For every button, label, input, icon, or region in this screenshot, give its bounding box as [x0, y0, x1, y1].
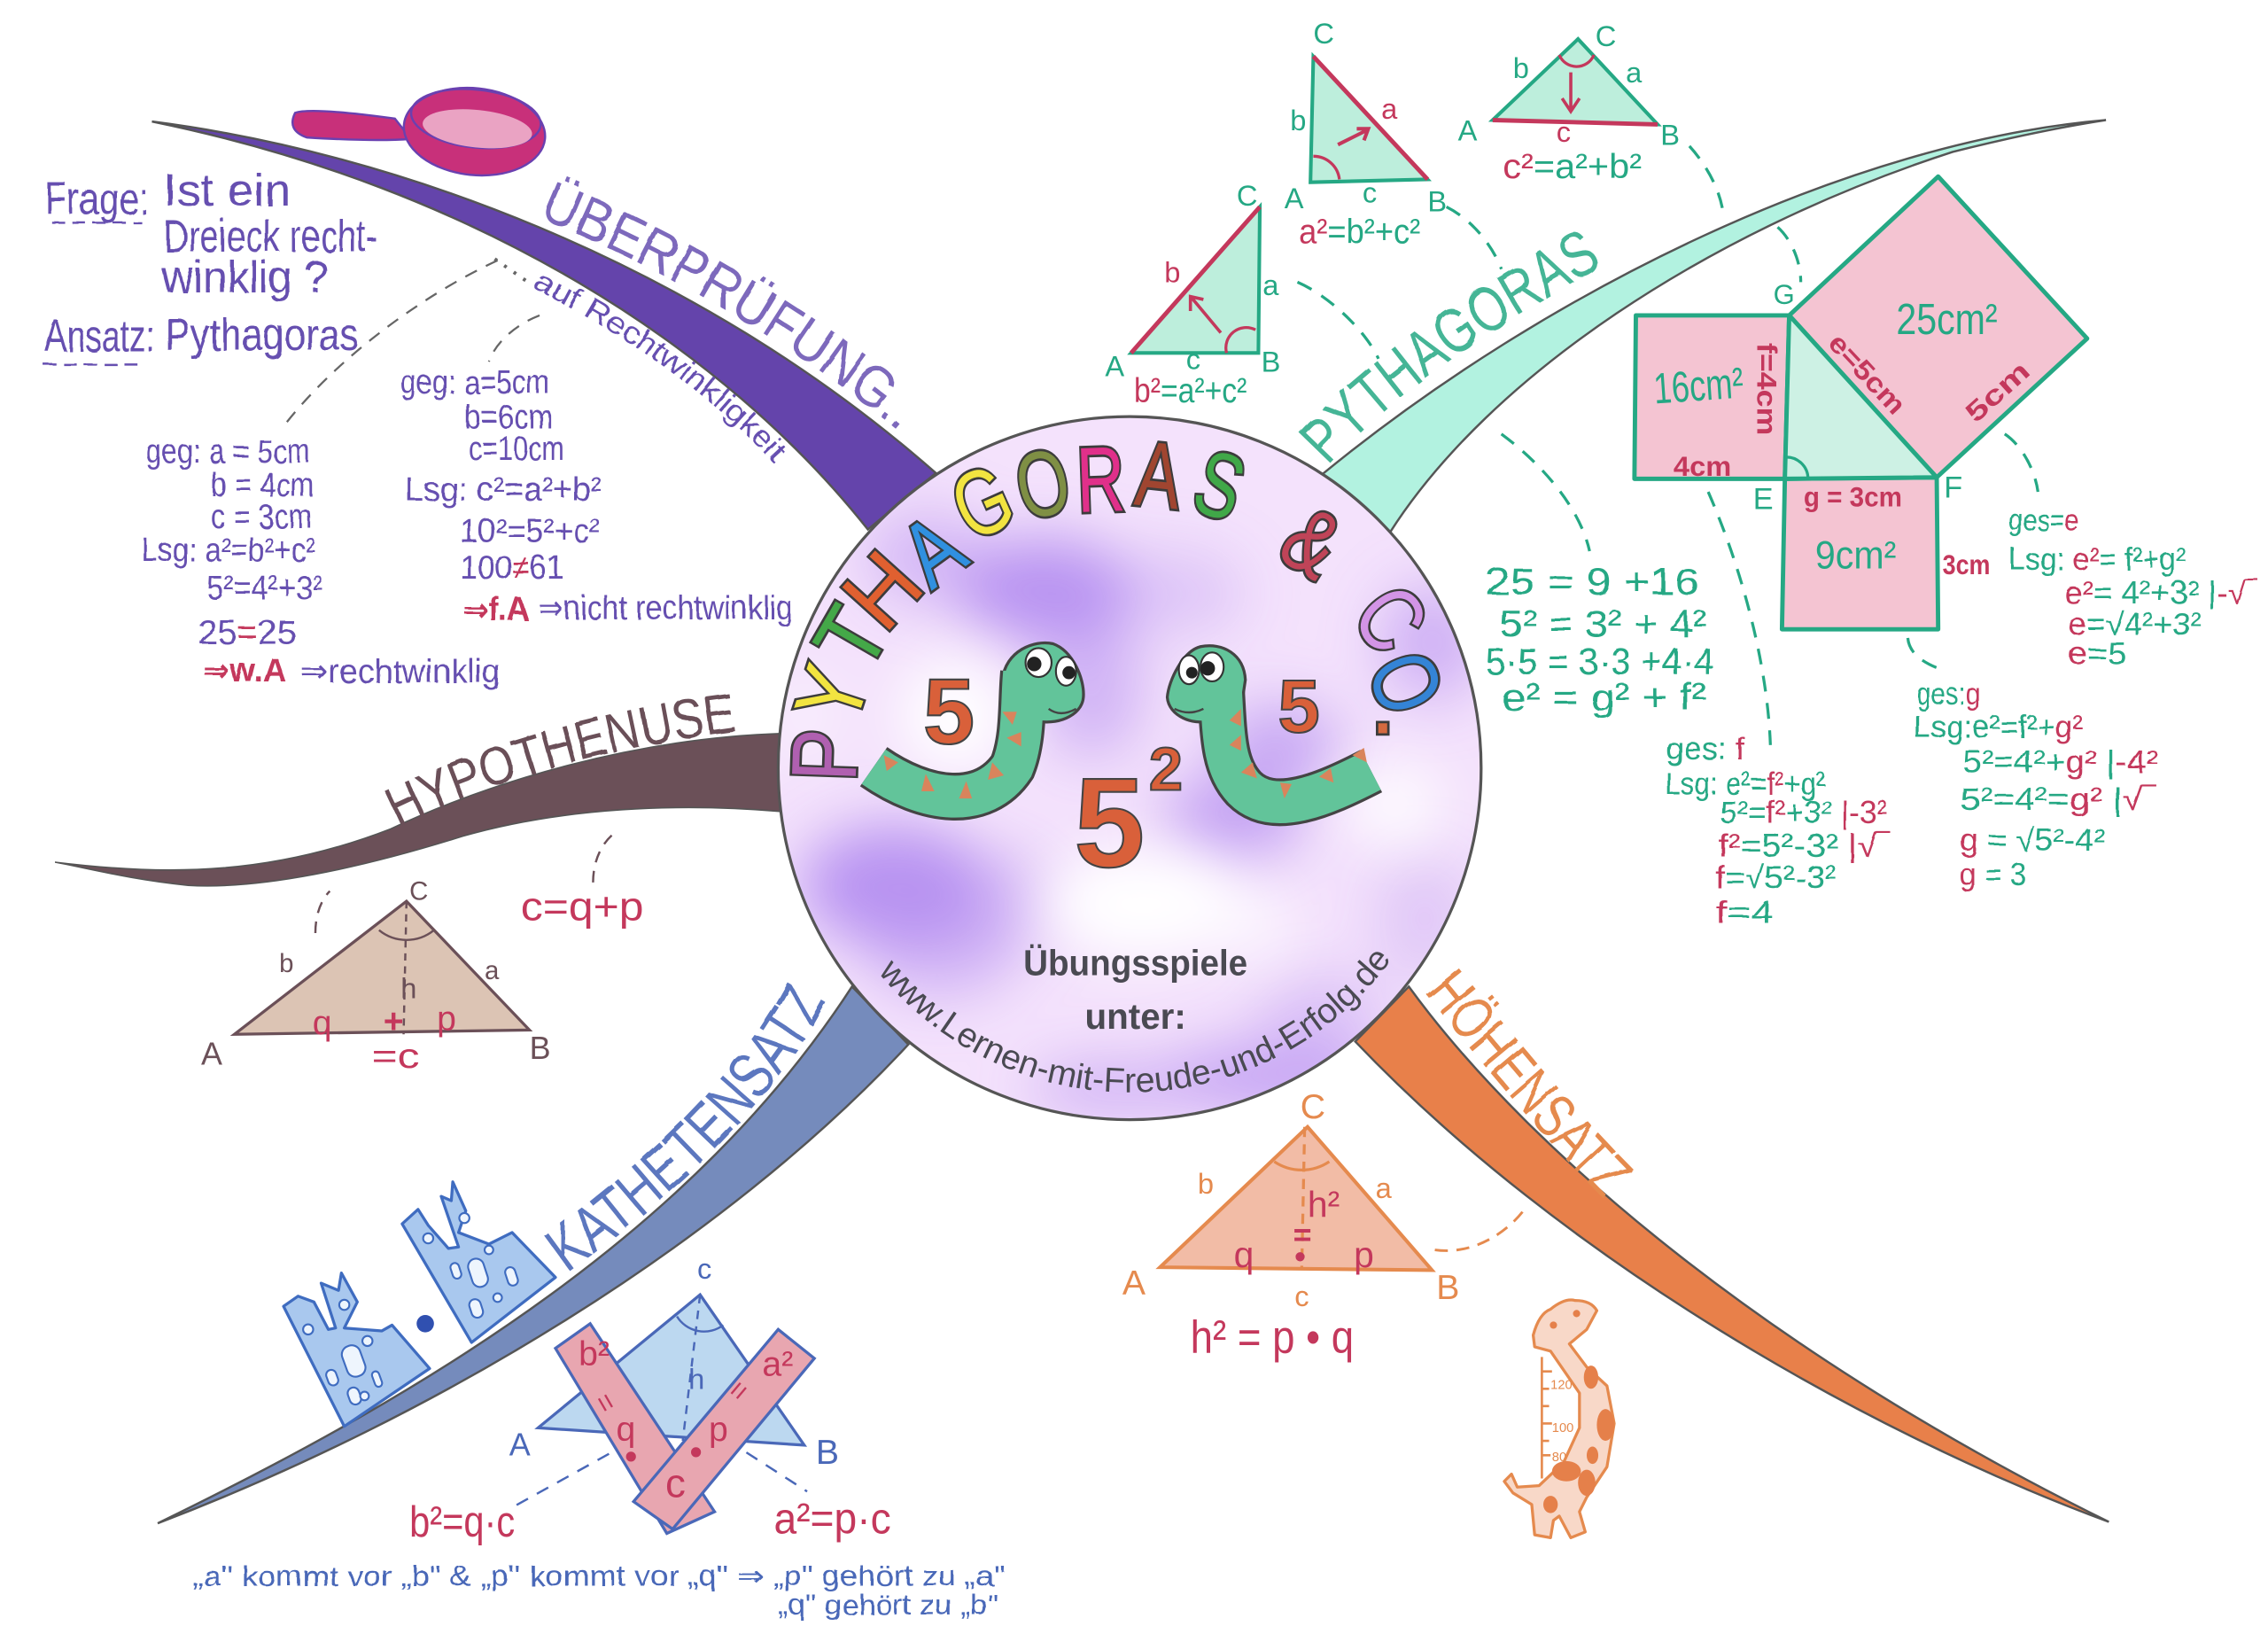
worked example: right triangle: Lsg: a²=b²+c² [142, 531, 315, 568]
worked example: right triangle [142, 432, 501, 690]
triangle: a² = b² + c²: a²=b²+c² [1299, 213, 1420, 251]
diagram: Kathetensatz triangle and strips: a² [762, 1346, 793, 1384]
website note: unter: [1084, 996, 1186, 1037]
heading: Pythagoras: PYTHAGORAS [1299, 232, 1598, 463]
solution: find f: f=4 [1715, 894, 1774, 930]
equations: area derivation [1486, 561, 1714, 719]
worked example: not a right triangle: 100≠61 [460, 548, 564, 586]
equations: area derivation: 25 = 9 +16 [1486, 561, 1699, 603]
worked example: not a right triangle: Lsg: c²=a²+b² [405, 471, 602, 508]
square labels: 4cm [1674, 451, 1731, 482]
worked example: right triangle: geg: a = 5cm [146, 432, 311, 470]
square labels: G [1774, 279, 1795, 310]
diagram: Höhensatz triangle: q [1234, 1234, 1254, 1275]
heading: Kathetensatz: KATHETENSATZ [544, 982, 826, 1271]
diagram: Kathetensatz triangle and strips: A [509, 1426, 531, 1462]
dashed connectors: Kathetensatz [515, 1452, 807, 1505]
strip: a² [633, 1329, 814, 1529]
worked example: not a right triangle: b=6cm [464, 398, 553, 435]
triangle: a² = b² + c²: a [1381, 92, 1398, 125]
title: Pythagoras & Co.: G [936, 443, 1028, 561]
numbers: 5 and 5²: 5 [923, 660, 975, 764]
title: Pythagoras & Co.: & [1263, 486, 1360, 600]
triangle: c² = a² + b²: c [1557, 115, 1571, 148]
solution: find g: ges:g [1916, 675, 1980, 712]
diagram: Höhensatz triangle: C [1301, 1088, 1325, 1126]
solution: find f: Lsg: e²=f²+g² [1665, 765, 1825, 801]
mnemonic note: „a" kommt vor „b" & „p" kommt vor „q" ⇒ „p" gehört zu „a" [192, 1559, 1006, 1591]
title: Pythagoras & Co.: A [1131, 423, 1186, 529]
square labels: 16cm² [1652, 360, 1744, 413]
diagram: hypotenuse triangle: =c [372, 1038, 420, 1076]
square labels: 3cm [1943, 549, 1990, 580]
title: Pythagoras & Co.: O [1348, 637, 1464, 728]
triangle: a² = b² + c²: A [1285, 182, 1304, 214]
title: Pythagoras & Co.: T [795, 590, 910, 686]
triangle: a² = b² + c²: B [1427, 184, 1447, 217]
diagram: hypotenuse triangle: C [409, 876, 428, 906]
equations: area derivation: e² = g² + f² [1502, 677, 1706, 719]
triangle: a² = b² + c²: b [1290, 104, 1306, 136]
dashed connectors: Hypothenuse [315, 832, 617, 933]
text block: question and approach: Dreieck recht- [164, 211, 377, 261]
diagram: hypotenuse triangle: B [530, 1030, 551, 1066]
sublabel: auf Rechtwinkligkeit: auf Rechtwinkligkeit [534, 276, 785, 464]
solution: find g [1914, 675, 2158, 892]
diagram: hypotenuse triangle: q [313, 1004, 332, 1042]
diagram: Kathetensatz triangle and strips: = [587, 1387, 625, 1418]
icon: giraffe with height ruler [1504, 1300, 1614, 1537]
title: Pythagoras & Co.: H [823, 532, 942, 649]
solution: find f: ges: f [1666, 730, 1745, 766]
worked example: right triangle: ⇒w.A [203, 651, 286, 689]
triangle: c² = a² + b²: c²=a²+b² [1503, 148, 1642, 186]
square labels: e=5cm [1822, 327, 1912, 421]
diagram: Höhensatz triangle: B [1436, 1269, 1459, 1307]
central circle [772, 415, 1483, 1122]
triangle: c² = a² + b² [1458, 19, 1680, 186]
equations: area derivation: 5·5 = 3·3 +4·4 [1486, 641, 1714, 682]
square labels: 25cm² [1896, 296, 1998, 344]
icon: giraffe with height ruler: 80 [1552, 1451, 1566, 1465]
solution: find e: ges=e [2009, 502, 2078, 538]
formula: a² = p·c: a²=p·c [773, 1496, 891, 1544]
diagram: hypotenuse triangle: h [400, 971, 416, 1004]
triangle: a² = b² + c²: c [1363, 176, 1377, 209]
text block: question and approach: Ansatz: [45, 311, 155, 362]
dashed connector: Höhensatz [1435, 1205, 1527, 1250]
diagram: Höhensatz triangle: = [1293, 1217, 1312, 1253]
website note: Übungsspiele [1023, 942, 1247, 983]
solution: find g: Lsg:e²=f²+g² [1914, 709, 2083, 745]
triangle: b² = a² + c²: c [1186, 342, 1200, 375]
diagram: hypotenuse triangle: + [384, 1003, 404, 1041]
diagram: Kathetensatz triangle and strips: c [665, 1461, 686, 1506]
diagram: Höhensatz triangle: • [1294, 1238, 1306, 1274]
text block: question and approach: Pythagoras [165, 309, 359, 360]
formula: h² = p · q: h² = p • q [1191, 1311, 1354, 1363]
square: 16 cm² [1635, 315, 1790, 478]
square labels [1652, 279, 2036, 580]
square labels: E [1753, 483, 1774, 517]
solution: find f: 5²=f²+3² |-3² [1720, 794, 1888, 830]
text block: question and approach: Ist ein [164, 165, 291, 215]
branch: Kathetensatz [158, 986, 908, 1523]
numbers: 5 and 5²: 5 [1278, 664, 1320, 748]
square: 9 cm² [1782, 478, 1938, 629]
diagram: Kathetensatz triangle and strips: q [617, 1411, 635, 1449]
triangle: b² = a² + c²: C [1237, 179, 1257, 212]
diagram: Kathetensatz triangle and strips: p [709, 1411, 728, 1449]
triangle: c² = a² + b²: C [1596, 19, 1616, 52]
square labels: f=4cm [1751, 343, 1783, 435]
triangle: b² = a² + c²: B [1262, 346, 1280, 378]
triangle: c² = a² + b²: B [1660, 118, 1680, 151]
square labels: 5cm [1959, 355, 2036, 429]
diagram: Höhensatz triangle: a [1376, 1171, 1393, 1204]
formula: c = q + p: c=q+p [521, 883, 644, 929]
triangle: c² = a² + b²: a [1626, 56, 1643, 89]
title: Pythagoras & Co. [772, 423, 1464, 783]
solution: find g: 5²=4²= g² |√‾ [1960, 781, 2157, 817]
dashed connectors: Überprüfung [282, 259, 540, 428]
diagram: Kathetensatz triangle and strips: B [816, 1434, 839, 1472]
icon: giraffe with height ruler: 100 [1552, 1421, 1573, 1435]
numbers: 5 and 5²: 2 [1149, 735, 1183, 803]
icon: multiplication dot [416, 1315, 434, 1333]
diagram: hypotenuse triangle: A [201, 1036, 222, 1072]
solution: find e [2009, 502, 2258, 671]
worked example: not a right triangle: c=10cm [469, 430, 564, 467]
diagram: hypotenuse triangle [201, 876, 551, 1076]
worked example: not a right triangle [400, 363, 793, 627]
diagram: Höhensatz triangle: h² [1308, 1184, 1340, 1225]
strip: b² [555, 1324, 715, 1534]
mnemonic note [192, 1559, 1006, 1621]
diagram: Kathetensatz triangle and strips: c [697, 1252, 711, 1285]
title: Pythagoras & Co.: Y [774, 653, 889, 735]
equations: area derivation: 5² = 3² + 4² [1500, 603, 1706, 644]
title: Pythagoras & Co.: C [1332, 566, 1448, 673]
diagram: hypotenuse triangle: a [485, 956, 500, 985]
diagram: Kathetensatz triangle and strips: = [720, 1373, 757, 1407]
right-angle mark [1785, 457, 1808, 478]
diagram: hypotenuse triangle: b [279, 949, 293, 978]
heading: Hypothenuse: HYPOTHENUSE [384, 695, 735, 825]
icon: magnifying glass [292, 81, 549, 183]
worked example: not a right triangle: 10²=5²+c² [460, 512, 601, 549]
solution: find e: e=√4²+3² [2069, 606, 2202, 642]
worked example: not a right triangle: geg: a=5cm [400, 363, 549, 401]
square labels: g = 3cm [1804, 481, 1902, 512]
title: Pythagoras & Co.: R [1075, 428, 1127, 533]
heading: Überprüfung: ÜBERPRÜFUNG.. [546, 175, 900, 429]
branch: Überprüfung [151, 121, 936, 530]
diagram: Kathetensatz triangle and strips [509, 1252, 839, 1534]
website note [1023, 942, 1247, 1037]
solution: find f: f²=5²-3² |√‾ [1719, 827, 1891, 863]
text block: question and approach: winklig ? [161, 252, 329, 302]
mnemonic note: „q" gehört zu „b" [778, 1588, 998, 1621]
solution: find e: e²= 4²+3² |-√‾ [2064, 574, 2258, 611]
worked example: right triangle: 5²=4²+3² [207, 569, 322, 606]
circle background [778, 416, 1481, 1120]
triangle: b² = a² + c²: b [1164, 255, 1180, 288]
icon: cathedral right [402, 1182, 555, 1342]
square labels: 9cm² [1815, 534, 1896, 578]
diagram: Höhensatz triangle [1122, 1088, 1459, 1312]
diagram: Höhensatz triangle: b [1198, 1167, 1214, 1200]
worked example: right triangle: 25=25 [198, 613, 297, 650]
diagram: Kathetensatz triangle and strips: • [690, 1434, 703, 1472]
numbers: 5 and 5² [923, 660, 1320, 894]
square labels: F [1944, 471, 1962, 505]
diagram: Höhensatz triangle: A [1122, 1264, 1146, 1303]
diagram: Höhensatz triangle: p [1354, 1234, 1374, 1275]
dashed connectors: Pythagoras [1297, 146, 2038, 745]
worked example: right triangle: ⇒rechtwinklig [301, 653, 501, 690]
triangle: c² = a² + b²: A [1458, 113, 1478, 146]
worked example: not a right triangle: ⇒f.A [462, 590, 530, 627]
website url: www.Lernen-mit-Freude-und-Erfolg.de [881, 952, 1389, 1093]
branch: Höhensatz [1355, 986, 2109, 1521]
triangle: a² = b² + c² [1285, 17, 1447, 251]
title: Pythagoras & Co.: S [1183, 431, 1256, 541]
solution: find f [1665, 730, 1891, 930]
formula: b² = q·c: b²=q·c [409, 1498, 515, 1546]
snake: left [874, 642, 1084, 798]
diagram: Kathetensatz triangle and strips: h [688, 1362, 704, 1395]
diagram: squares on the sides of the right triangle [1635, 176, 2087, 629]
square: 25 cm² [1790, 176, 2087, 478]
triangle: a² = b² + c²: C [1313, 17, 1334, 50]
triangle: EFG [1785, 315, 1937, 478]
triangle: b² = a² + c²: b²=a²+c² [1134, 372, 1247, 410]
icon: giraffe with height ruler: 120 [1550, 1378, 1573, 1392]
triangle: b² = a² + c²: a [1262, 268, 1279, 301]
solution: find f: f=√5²-3² [1715, 859, 1837, 895]
snake: right [1168, 646, 1371, 802]
worked example: right triangle: b = 4cm [211, 466, 314, 503]
diagram: hypotenuse triangle: p [437, 1000, 456, 1038]
branch: Pythagoras [1322, 121, 2106, 533]
triangle: c² = a² + b²: b [1513, 51, 1529, 84]
heading: Höhensatz: HÖHENSATZ [1426, 968, 1634, 1198]
solution: find g: g = 3 [1960, 856, 2026, 892]
branch: Hypothenuse [55, 734, 784, 886]
triangle: b² = a² + c²: A [1105, 349, 1124, 382]
solution: find g: 5²=4²+ g² |-4² [1962, 743, 2158, 780]
icon: cathedral left [284, 1273, 430, 1427]
triangle: b² = a² + c² [1105, 179, 1280, 410]
title: Pythagoras & Co.: P [772, 727, 877, 783]
worked example: right triangle: c = 3cm [211, 498, 313, 535]
solution: find e: e=5 [2069, 634, 2126, 671]
solution: find g: g = √5²-4² [1960, 821, 2104, 858]
text block: question and approach [43, 165, 377, 364]
title: Pythagoras & Co.: A [882, 494, 983, 608]
diagram: Kathetensatz triangle and strips: • [625, 1438, 637, 1476]
title: Pythagoras & Co.: . [1370, 650, 1395, 754]
solution: find e: Lsg: e²= f²+g² [2009, 541, 2186, 577]
diagram: Kathetensatz triangle and strips: b² [579, 1335, 610, 1373]
worked example: not a right triangle: ⇒nicht rechtwinklig [538, 589, 793, 626]
numbers: 5 and 5²: 5 [1074, 752, 1145, 894]
title: Pythagoras & Co.: O [1006, 429, 1079, 541]
diagram: Höhensatz triangle: c [1294, 1280, 1309, 1312]
text block: question and approach: Frage: [45, 174, 149, 224]
